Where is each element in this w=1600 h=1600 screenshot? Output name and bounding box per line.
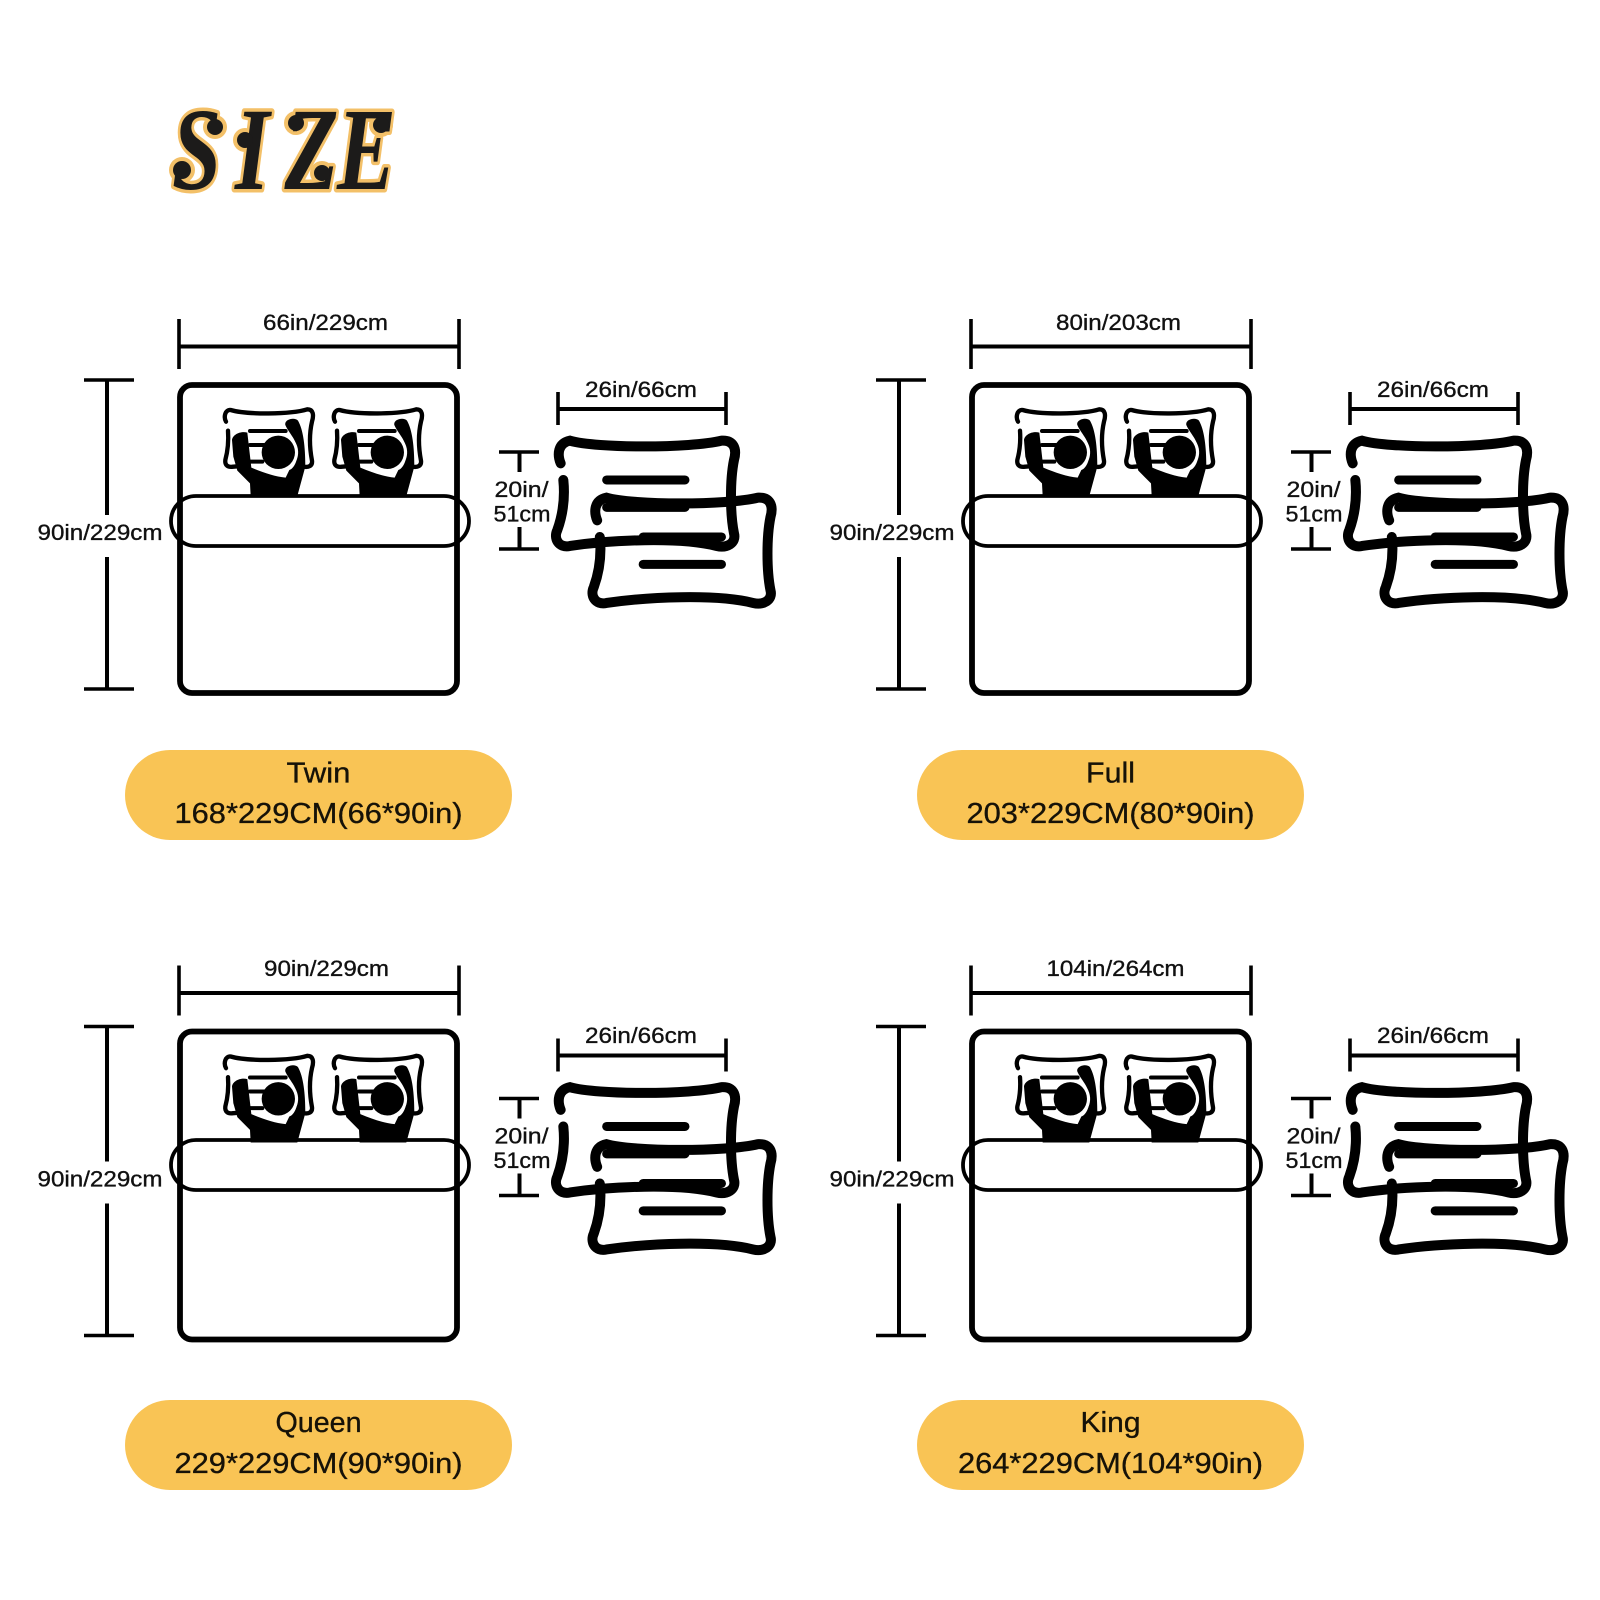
size pill: twin: Twin [286,758,350,790]
panel: king [830,956,1564,1490]
width label: full: 80in/203cm [1056,310,1181,335]
title: E [336,84,396,215]
panel: full [830,310,1564,840]
size pill: king [917,1400,1304,1490]
size pill: full: Full [1086,758,1135,790]
bed and pillow diagram: twin [84,319,772,693]
size pill: queen: Queen [276,1407,362,1439]
bed band: full [963,496,1261,546]
title: Z [284,84,339,215]
pillow height label: queen: 20in/ [494,1124,549,1148]
panel: twin [38,310,772,840]
pillow height label line 2: queen: 51cm [494,1148,550,1173]
length label: queen: 90in/229cm [38,1166,162,1192]
width label: queen: 90in/229cm [264,956,389,981]
pillow width label: twin: 26in/66cm [585,377,697,402]
title: S [172,84,221,215]
pillow width label: queen: 26in/66cm [585,1023,697,1048]
pillow width label: king: 26in/66cm [1377,1023,1489,1048]
title [169,84,396,215]
bed band: queen [171,1140,469,1190]
pillow height label: twin: 20in/ [494,477,549,502]
length label: twin: 90in/229cm [38,520,162,545]
panel: queen [38,956,772,1490]
pillow height label line 2: king: 51cm [1286,1148,1342,1173]
bed band: king [963,1140,1261,1190]
size pill: queen: 229*229CM(90*90in) [174,1448,462,1480]
pillow height label: full: 20in/ [1286,477,1341,502]
pillow width label: full: 26in/66cm [1377,377,1489,402]
size pill: queen [125,1400,512,1490]
size pill: king: King [1080,1407,1140,1439]
length label: king: 90in/229cm [830,1166,954,1192]
bed and pillow diagram: full [876,319,1564,693]
size pill: full [917,750,1304,840]
title: I [233,84,272,215]
bed and pillow diagram: king [876,966,1564,1340]
size pill: full: 203*229CM(80*90in) [966,798,1254,830]
bed and pillow diagram: queen [84,966,772,1340]
width label: twin: 66in/229cm [263,310,388,335]
pillow height label line 2: full: 51cm [1286,502,1342,526]
pillow height label line 2: twin: 51cm [494,502,550,526]
size pill: twin: 168*229CM(66*90in) [174,798,462,830]
pillow height label: king: 20in/ [1286,1124,1341,1148]
size pill: king: 264*229CM(104*90in) [958,1448,1263,1480]
bed band: twin [171,496,469,546]
width label: king: 104in/264cm [1046,956,1184,981]
size pill: twin [125,750,512,840]
length label: full: 90in/229cm [830,520,954,545]
